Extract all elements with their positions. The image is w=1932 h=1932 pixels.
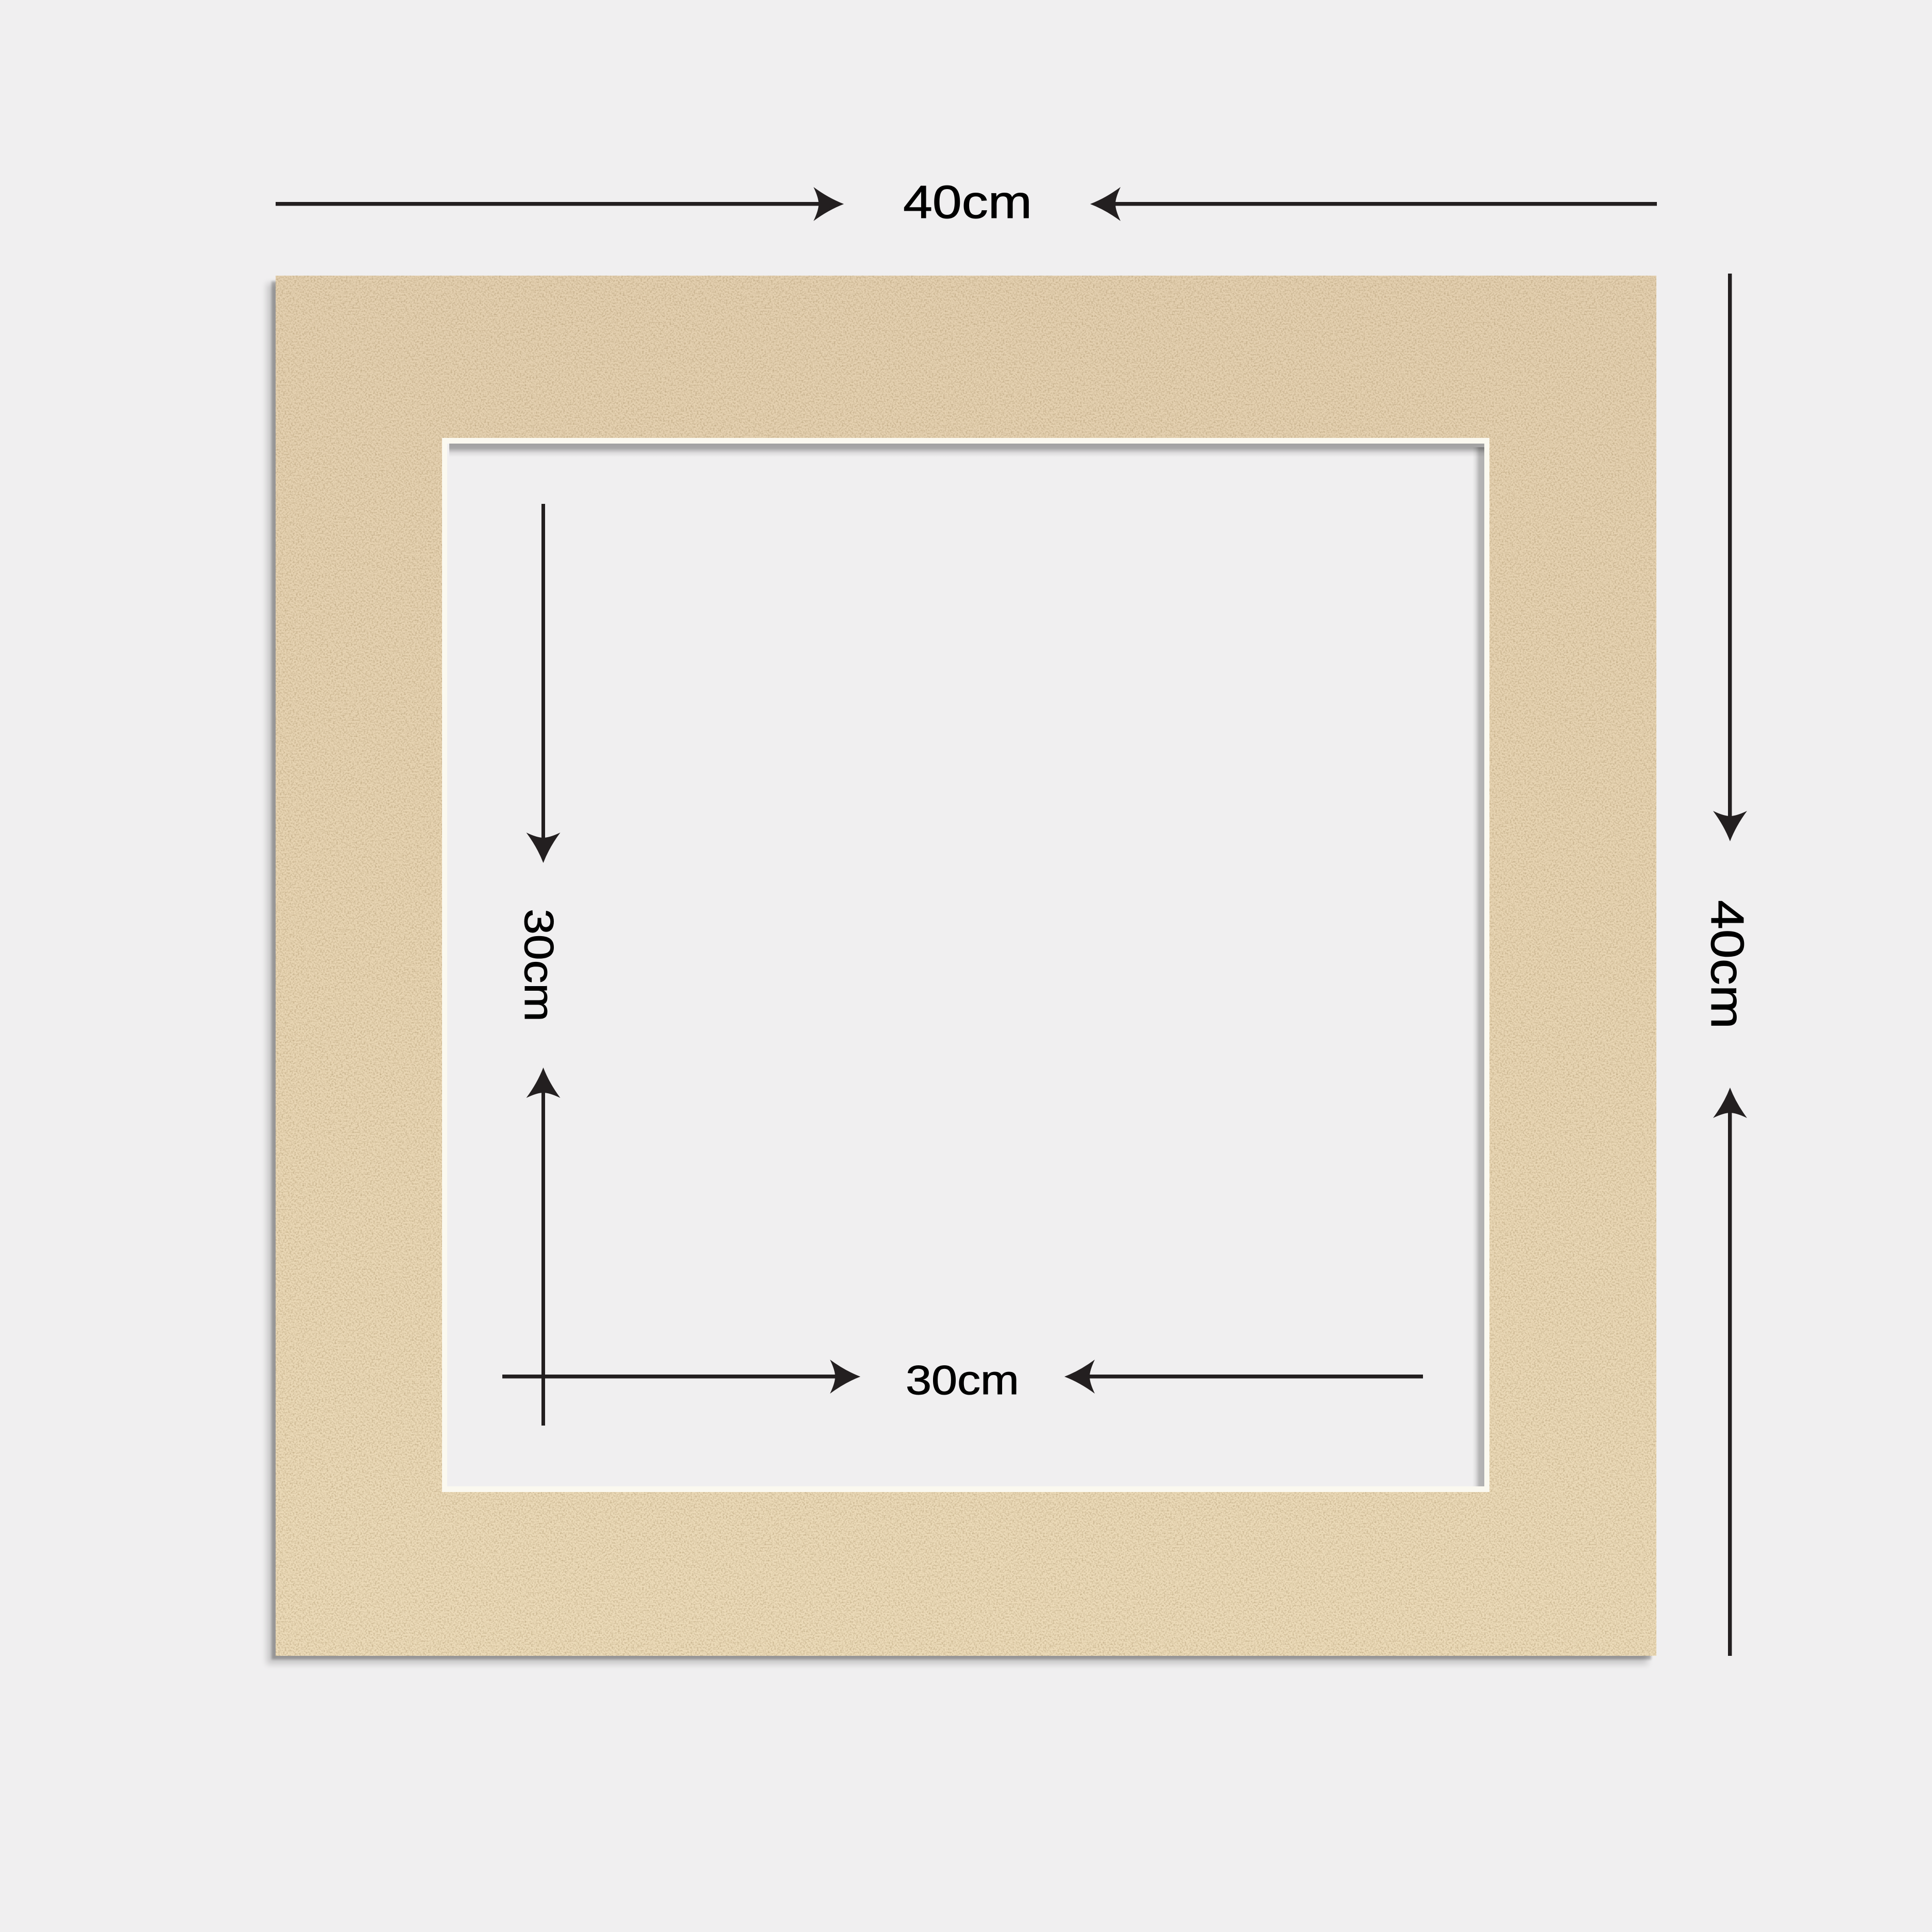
- arrow: right pointing left: [1090, 187, 1657, 221]
- window opening: [442, 438, 1489, 1492]
- arrow: right pointing left: [1064, 1360, 1423, 1394]
- arrow: left pointing right: [276, 187, 844, 221]
- mat drop shadow: [267, 281, 1651, 1664]
- window inner shadow: [449, 444, 1485, 1486]
- arrow: top pointing down: [1713, 274, 1747, 841]
- label: 40cm width: 40cm: [903, 177, 1032, 228]
- label: 40cm height: 40cm: [1701, 900, 1753, 1029]
- opening height dimension: 30cm: [516, 504, 562, 1426]
- opening width dimension: 30cm: [502, 1357, 1423, 1403]
- label: 30cm height: 30cm: [516, 909, 562, 1022]
- arrow: left pointing right: [502, 1360, 860, 1394]
- outer width dimension: 40cm: [276, 177, 1657, 228]
- arrow: bottom pointing up: [527, 1067, 561, 1426]
- mat border with window opening: [276, 276, 1656, 1656]
- cream bevel edge: [442, 438, 1489, 1492]
- outer height dimension: 40cm: [1701, 274, 1753, 1656]
- arrow: bottom pointing up: [1713, 1088, 1747, 1656]
- arrow: top pointing down: [527, 504, 561, 863]
- label: 30cm width: 30cm: [906, 1357, 1019, 1403]
- panel: mat board: [267, 276, 1656, 1664]
